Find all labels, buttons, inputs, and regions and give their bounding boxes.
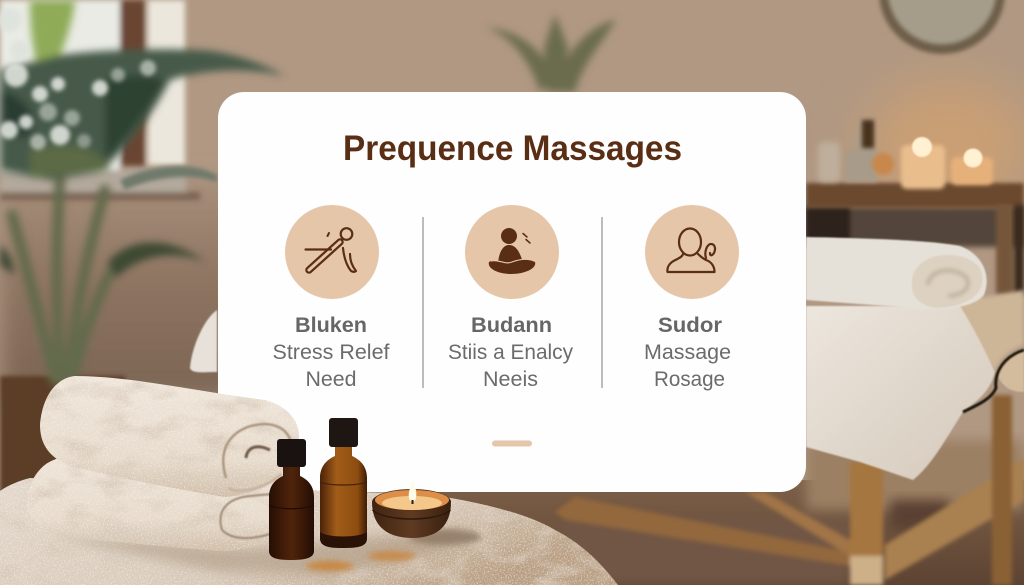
column 3 text: Sudor [658,314,722,337]
foreground towels, bottles and candle [0,376,618,585]
massage table with wooden legs [555,395,1024,585]
candle in bowl [372,480,451,538]
shelf, candles and bottle [806,120,1024,295]
warm candle glow [865,80,1024,210]
upper rolled towel [40,376,299,497]
white card panel [218,92,806,492]
sheet behind card on the left [190,310,217,372]
title: Prequence Massages [343,129,682,168]
table head pad [996,350,1024,392]
column 2 text: Neeis [483,368,538,391]
divider right [601,217,603,388]
icon: stretching figure [285,205,379,299]
column 1 text: Need [306,368,356,391]
divider left [422,217,424,388]
column 3 text: Rosage [654,368,725,391]
table towel [0,478,618,585]
window with frame [0,0,200,200]
column 2 text: Budann [471,314,552,337]
column 2 text: Stiis a Enalcy [448,341,573,364]
lower rolled towel [27,445,295,551]
column 3 text: Massage [644,341,731,364]
tan table top at right [950,290,1024,372]
progress pill [492,440,532,446]
wall plant top centre [486,14,616,92]
table sheet [806,306,995,480]
head pad dark edge [963,350,1024,412]
warm light on cloth [306,529,481,571]
amber bottle front [269,439,314,560]
amber bottle back [320,418,367,548]
column 1 text: Bluken [295,314,367,337]
column 1 text [272,314,390,391]
palm plant on the left [0,0,285,380]
sill reflection frond [120,166,217,190]
icon: seated meditating figure [465,205,559,299]
column 3 text [644,314,731,391]
column 2 text [448,314,573,391]
column 1 text: Stress Relef [272,341,390,364]
towel shadow [45,530,470,575]
bokeh highlights in plant [0,8,156,150]
pot of plant [0,376,125,494]
rolled towel on table [806,237,987,309]
icon: person outline [645,205,739,299]
left wall shading [0,180,300,400]
round mirror [879,0,1005,54]
floor and lower room [420,440,1024,585]
